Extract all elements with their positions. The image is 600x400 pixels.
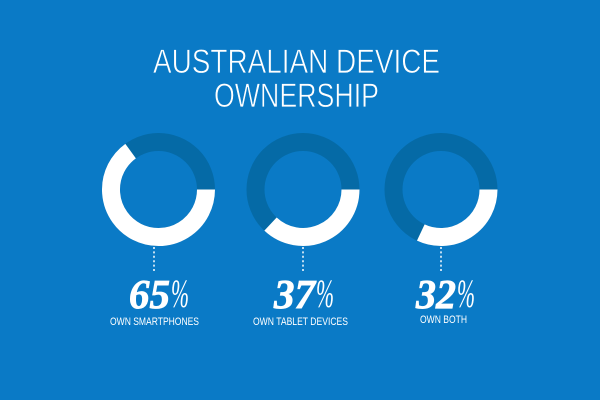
title	[153, 43, 440, 115]
label: own tablet devices: OWN TABLET DEVICES	[253, 316, 348, 328]
label: own both: OWN BOTH	[420, 314, 467, 326]
stat: 32%	[415, 271, 475, 317]
stat: 37%	[273, 271, 334, 317]
donut: 65% own smartphones	[111, 142, 206, 237]
title: AUSTRALIAN DEVICE	[153, 43, 440, 81]
stat: 65%: %	[171, 271, 189, 316]
title: OWNERSHIP	[214, 77, 379, 115]
stat: 65%	[129, 271, 189, 317]
donut: 32% own both	[394, 142, 488, 237]
stat: 32%: 32	[415, 271, 456, 317]
label: own smartphones: OWN SMARTPHONES	[110, 316, 199, 328]
stat: 37%: 37	[273, 271, 316, 317]
dotted connector 2	[302, 247, 304, 272]
stat: 65%: 65	[129, 271, 170, 317]
dotted connector 1	[153, 247, 155, 272]
stat: 37%: %	[316, 271, 334, 316]
stat: 32%: %	[457, 271, 475, 316]
dotted connector 3	[440, 247, 442, 272]
donut: 37% own tablet devices	[256, 142, 350, 237]
